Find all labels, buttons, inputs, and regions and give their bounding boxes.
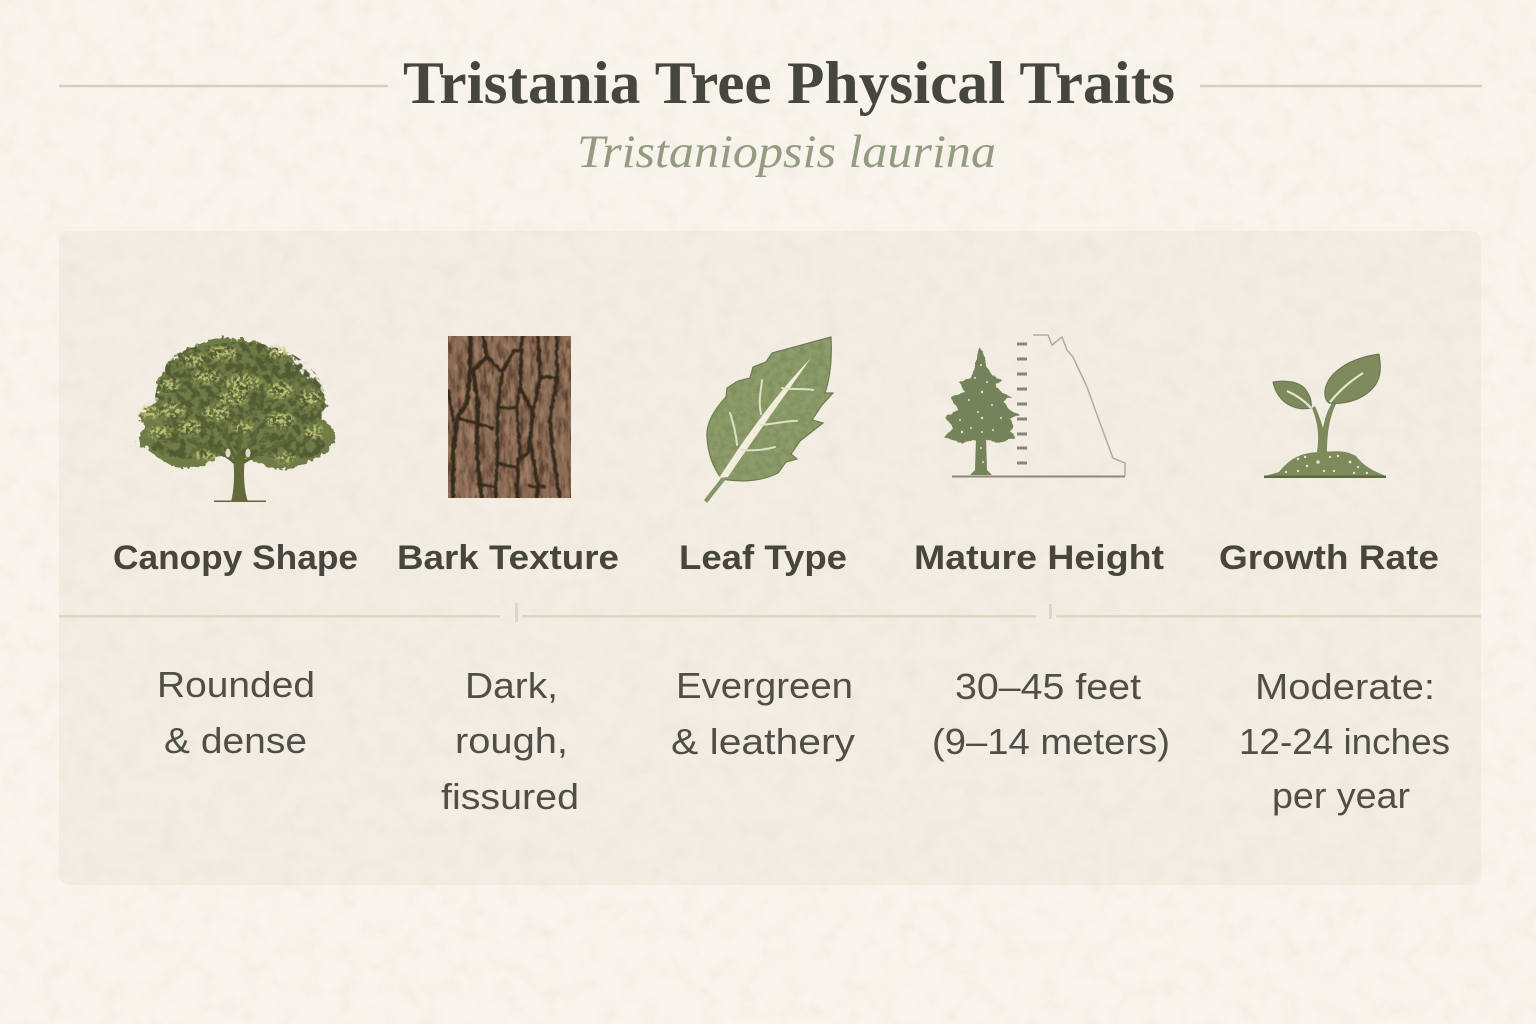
value: mature height: (9–14 meters) bbox=[932, 721, 1170, 762]
value: growth rate: 12-24 inches bbox=[1239, 721, 1450, 762]
value: leaf type: & leathery bbox=[671, 721, 855, 762]
value: leaf type: Evergreen bbox=[676, 665, 853, 706]
icon: growing sprout bbox=[1264, 354, 1386, 478]
heading: canopy shape: Canopy Shape bbox=[113, 539, 358, 577]
conifer tree bbox=[944, 347, 1019, 475]
value: growth rate bbox=[1239, 666, 1450, 816]
icon: bark texture bbox=[448, 335, 571, 500]
heading: bark texture: Bark Texture bbox=[397, 539, 619, 577]
canopy foliage bbox=[138, 337, 337, 470]
value: bark texture bbox=[441, 665, 579, 817]
value: growth rate: Moderate: bbox=[1255, 666, 1435, 707]
heading: growth rate: Growth Rate bbox=[1219, 539, 1439, 577]
icon: mature height tree with ruler bbox=[944, 335, 1125, 478]
value: growth rate: per year bbox=[1272, 775, 1410, 816]
value: canopy shape bbox=[157, 664, 315, 761]
value: canopy shape: & dense bbox=[164, 720, 307, 761]
icon: leaf bbox=[700, 335, 836, 503]
ruler ticks bbox=[1017, 342, 1027, 464]
value: bark texture: Dark, bbox=[465, 665, 558, 706]
value: bark texture: rough, bbox=[455, 720, 568, 761]
title: Tristania Tree Physical Traits bbox=[403, 50, 1175, 116]
trunk and branches bbox=[188, 428, 292, 502]
value: mature height bbox=[932, 666, 1170, 762]
heading: mature height: Mature Height bbox=[914, 539, 1164, 577]
value: canopy shape: Rounded bbox=[157, 664, 315, 705]
height outline bbox=[1033, 335, 1125, 476]
panel: physical traits bbox=[59, 231, 1481, 885]
value: leaf type bbox=[671, 665, 855, 762]
icon: rounded canopy tree bbox=[138, 337, 337, 502]
value: bark texture: fissured bbox=[441, 776, 579, 817]
subtitle: Tristaniopsis laurina bbox=[577, 126, 996, 178]
header bbox=[59, 50, 1482, 178]
trait headings bbox=[113, 539, 1439, 577]
ground line bbox=[952, 476, 1125, 478]
heading: leaf type: Leaf Type bbox=[679, 539, 847, 577]
value: mature height: 30–45 feet bbox=[955, 666, 1141, 707]
